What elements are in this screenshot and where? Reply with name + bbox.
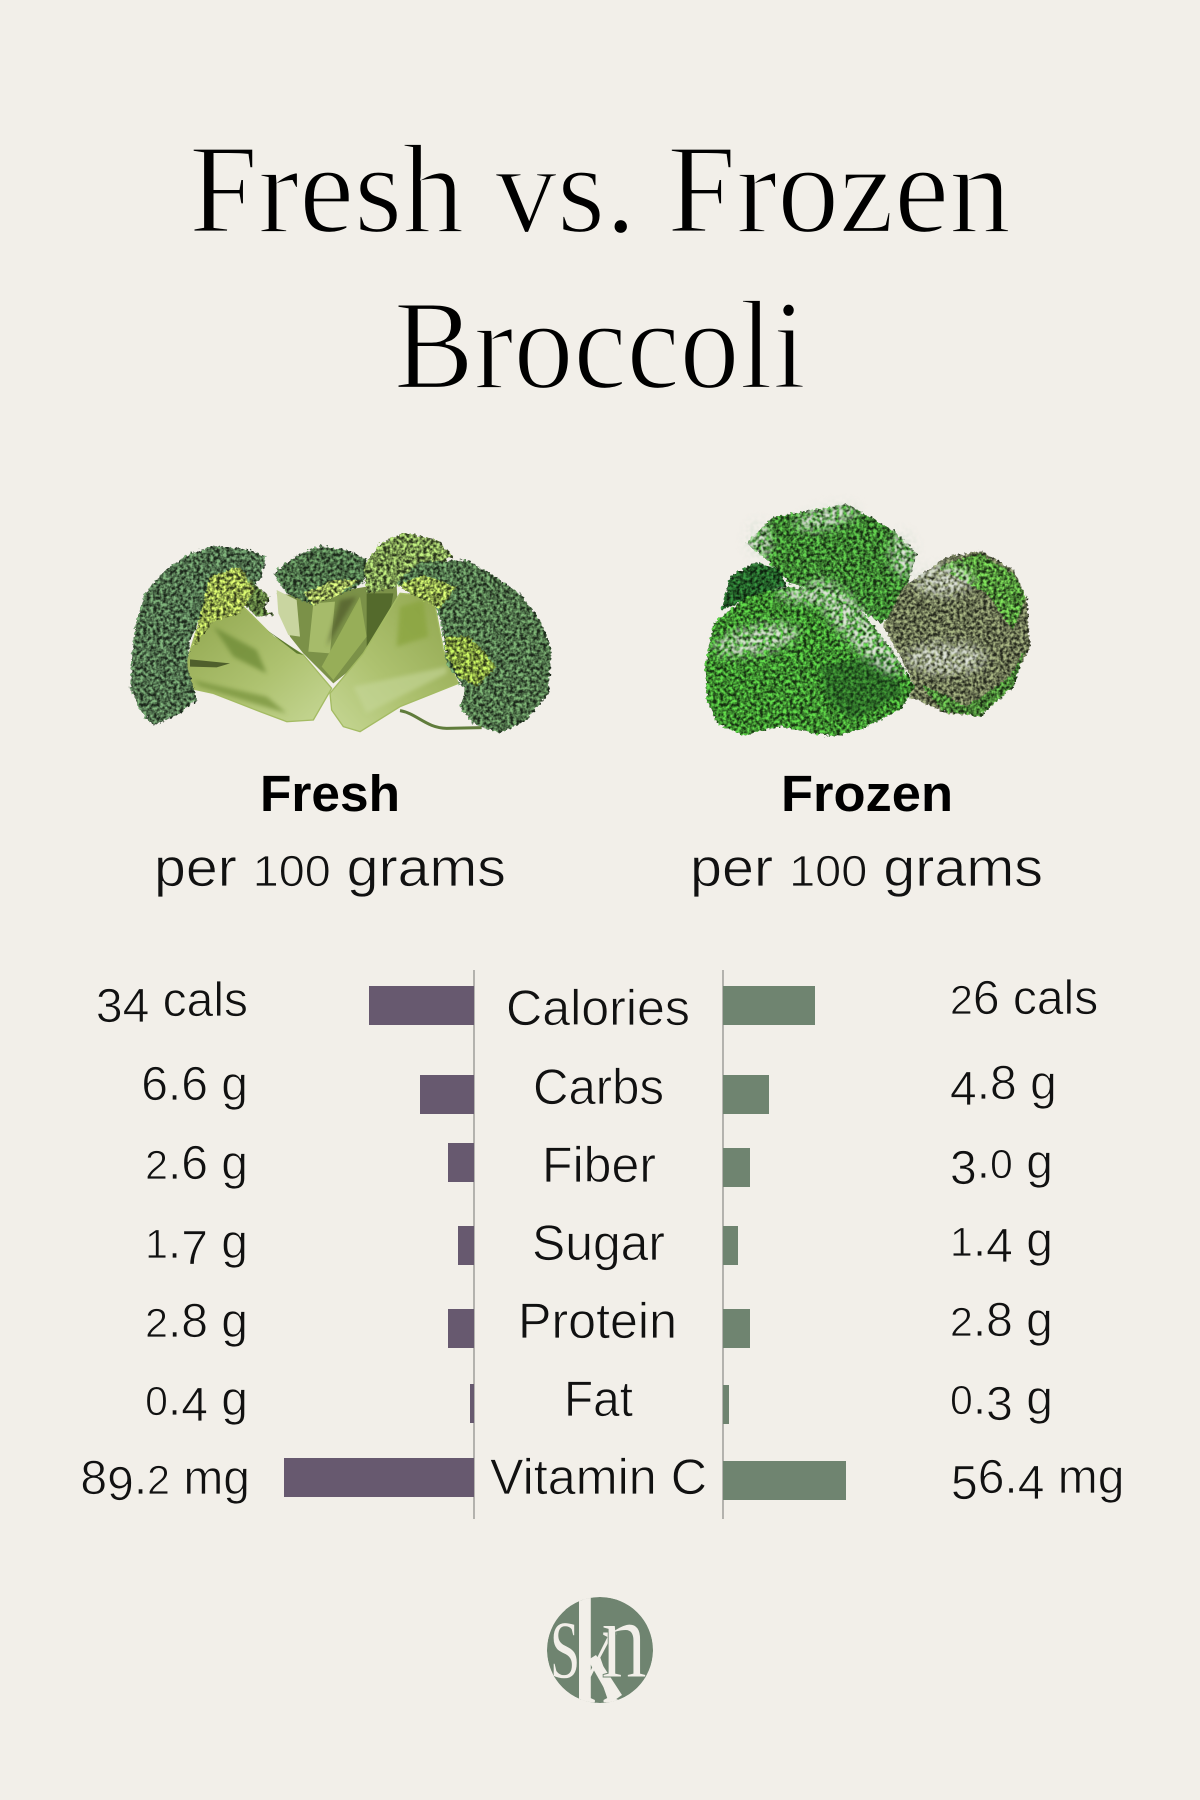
back stems filler	[277, 587, 400, 683]
row: sugar: 4	[986, 1220, 1013, 1273]
row: calories: cals	[149, 974, 248, 1027]
row: sugar: Sugar	[532, 1215, 665, 1271]
front floret dark shade	[820, 653, 903, 720]
middle floret	[273, 546, 367, 605]
row: fat	[145, 1371, 1053, 1432]
row: vitamin c: 2 mg	[147, 1452, 250, 1505]
image: fresh broccoli	[131, 533, 552, 733]
heading: fresh: Fresh	[260, 765, 400, 822]
right floret lower green	[920, 647, 1027, 717]
row: carbs: 4	[950, 1063, 977, 1116]
row: carbs: 6.6 g	[141, 1058, 248, 1111]
row: sugar	[145, 1214, 1053, 1275]
row: fiber: .0 g	[977, 1136, 1053, 1189]
thin stem	[400, 711, 482, 728]
row: sugar: 1.	[950, 1214, 986, 1267]
right floret	[883, 551, 1030, 717]
image: frozen broccoli	[705, 497, 1030, 737]
row: fiber: 3	[950, 1142, 977, 1195]
row: vitamin c: mg	[1044, 1451, 1124, 1504]
left crown strands	[243, 580, 275, 617]
row: calories: Calories	[506, 980, 690, 1036]
heading: frozen: Frozen	[781, 765, 953, 822]
row: protein: Protein	[518, 1293, 677, 1349]
row: carbs: Carbs	[533, 1059, 664, 1115]
comparison chart	[80, 970, 1124, 1519]
axis left	[473, 970, 475, 1519]
row: fiber: 2.6 g	[145, 1137, 248, 1190]
row: fat: 0.	[950, 1372, 986, 1425]
middle stems	[308, 602, 335, 653]
row: fiber: Fiber	[542, 1137, 656, 1193]
title: Fresh vs. Frozen	[189, 120, 1011, 260]
row: fiber	[145, 1136, 1053, 1195]
row: fat: 0.	[145, 1373, 181, 1426]
axis right	[722, 970, 724, 1519]
title	[189, 120, 1011, 416]
row: fat: g	[208, 1373, 248, 1426]
row: vitamin c	[80, 1449, 1124, 1511]
logo: skn monogram: n	[601, 1578, 647, 1702]
right crown	[397, 560, 552, 733]
row: calories: 26 cals	[950, 972, 1098, 1025]
row: calories: 34	[96, 980, 149, 1033]
logo: skn monogram	[547, 1597, 653, 1703]
row: sugar: 1.	[145, 1216, 181, 1269]
row: protein	[145, 1293, 1053, 1349]
subheading: fresh per 100 grams: per 100 grams	[154, 838, 506, 898]
row: fat: 3	[986, 1378, 1013, 1431]
logo: skn monogram: s	[550, 1573, 580, 1704]
row: vitamin c: 4	[1018, 1457, 1044, 1510]
logo: skn monogram: k	[577, 1565, 619, 1737]
pale stem behind	[277, 590, 300, 637]
front floret	[705, 587, 915, 737]
row: carbs	[141, 1057, 1057, 1116]
row: vitamin c: .	[134, 1452, 147, 1505]
left small floret	[722, 562, 787, 610]
row: sugar: g	[208, 1216, 248, 1269]
row: protein: 2.8 g	[950, 1294, 1053, 1347]
row: vitamin c: 5	[951, 1457, 978, 1510]
frost patches	[711, 497, 987, 684]
left stem	[185, 597, 332, 722]
row: vitamin c: 8	[80, 1452, 107, 1505]
right crown yellow heart	[445, 637, 497, 687]
title: Broccoli	[394, 276, 806, 416]
right floret green top	[937, 553, 1027, 630]
row: vitamin c: Vitamin C	[490, 1449, 707, 1505]
subheading: frozen per 100 grams: per 100 grams	[690, 838, 1043, 898]
left crown	[131, 546, 267, 726]
row: vitamin c: 9	[107, 1458, 134, 1511]
back floret	[747, 504, 917, 623]
right stem	[330, 593, 458, 732]
row: protein: 2.8 g	[145, 1295, 248, 1348]
top right floret	[363, 533, 453, 593]
left crown yellow heart	[193, 567, 255, 647]
row: fat: 4	[181, 1379, 208, 1432]
row: fat: g	[1013, 1372, 1053, 1425]
row: calories	[96, 972, 1098, 1036]
row: carbs: .8 g	[977, 1057, 1057, 1110]
row: sugar: g	[1013, 1214, 1053, 1267]
row: fat: Fat	[564, 1371, 633, 1427]
row: sugar: 7	[181, 1222, 208, 1275]
row: vitamin c: 6.	[978, 1451, 1018, 1504]
